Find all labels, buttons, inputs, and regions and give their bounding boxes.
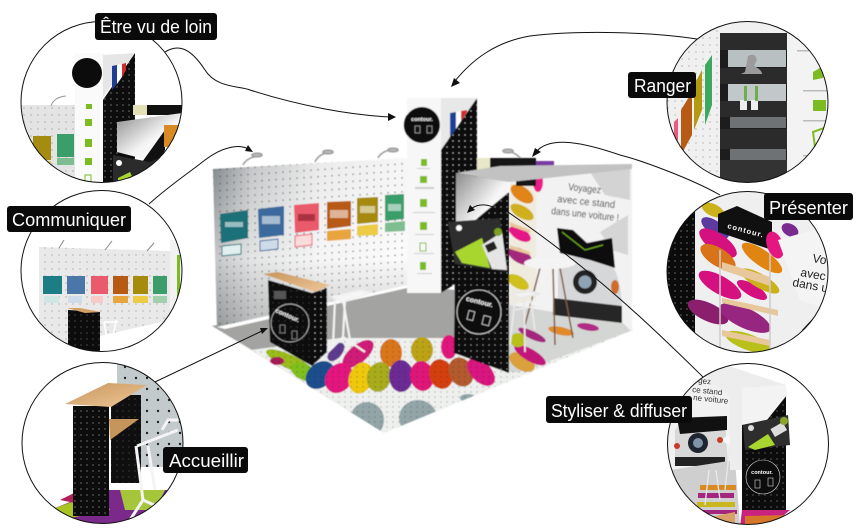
carpet ovals bbox=[254, 322, 616, 432]
right graphic wall bbox=[505, 166, 632, 352]
label: ranger bbox=[628, 72, 696, 98]
arrow: styliser et diffuser bbox=[467, 205, 703, 377]
circle: être vu de loin bbox=[20, 20, 185, 190]
background shelving top bbox=[476, 158, 554, 172]
circle: présenter bbox=[666, 190, 836, 360]
back perforated wall bbox=[213, 158, 407, 329]
stool bbox=[510, 291, 540, 352]
arrow: ranger bbox=[451, 32, 697, 87]
circle: styliser et diffuser: gez bbox=[698, 376, 712, 386]
wall slogan: dans une voiture ! bbox=[551, 206, 619, 224]
roof bbox=[456, 164, 632, 182]
label: styliser et diffuser: Styliser & diffuser bbox=[551, 401, 687, 421]
label: accueillir bbox=[163, 447, 248, 473]
floor bbox=[212, 285, 633, 433]
label: être vu de loin: Être vu de loin bbox=[100, 17, 212, 37]
label: présenter: Présenter bbox=[769, 198, 848, 218]
wall slogan bbox=[551, 182, 619, 224]
arrow: accueillir bbox=[155, 328, 268, 382]
leaf shelving bbox=[505, 172, 543, 305]
circle: accueillir bbox=[21, 362, 185, 526]
arrow: présenter bbox=[532, 142, 720, 195]
label: présenter bbox=[764, 193, 853, 220]
central stand scene bbox=[212, 98, 633, 438]
label: ranger: Ranger bbox=[634, 76, 691, 96]
car bbox=[553, 228, 622, 323]
tower green icons bbox=[413, 159, 435, 274]
arrow: communiquer bbox=[149, 145, 253, 204]
circle: styliser et diffuser: ne voiture ! bbox=[693, 393, 733, 406]
tower logo: contour. bbox=[411, 117, 433, 123]
front panel bbox=[448, 173, 509, 373]
posters bbox=[220, 194, 405, 256]
circle: présenter: avec c bbox=[799, 265, 836, 285]
panel logo bbox=[457, 290, 501, 334]
label: être vu de loin bbox=[95, 13, 217, 40]
panel logo: contour. bbox=[465, 296, 494, 309]
white chair bbox=[328, 291, 370, 352]
circle: présenter: Vo bbox=[811, 251, 828, 267]
circle: ranger bbox=[666, 20, 832, 185]
label: accueillir: Accueillir bbox=[169, 451, 244, 471]
arrow: être vu de loin bbox=[165, 48, 396, 121]
circle: présenter: contour. bbox=[726, 221, 765, 240]
graphic panel bbox=[448, 218, 507, 272]
label: communiquer: Communiquer bbox=[12, 210, 126, 230]
tower logo bbox=[404, 107, 440, 143]
french flag bbox=[450, 110, 467, 137]
wall slogan: avec ce stand bbox=[557, 194, 616, 211]
table bbox=[524, 257, 576, 345]
counter bbox=[263, 272, 330, 366]
counter: contour. bbox=[274, 307, 301, 324]
circle: styliser et diffuser bbox=[666, 362, 831, 527]
tower bbox=[404, 98, 477, 293]
wall lamps bbox=[243, 148, 522, 165]
arrows bbox=[149, 32, 720, 382]
circle: styliser et diffuser: contour. bbox=[751, 470, 773, 476]
circle: styliser et diffuser: ce stand bbox=[692, 385, 723, 397]
circle: présenter: dans u bbox=[791, 275, 829, 295]
wall slogan: Voyagez bbox=[568, 182, 602, 196]
circle: communiquer bbox=[20, 190, 184, 355]
